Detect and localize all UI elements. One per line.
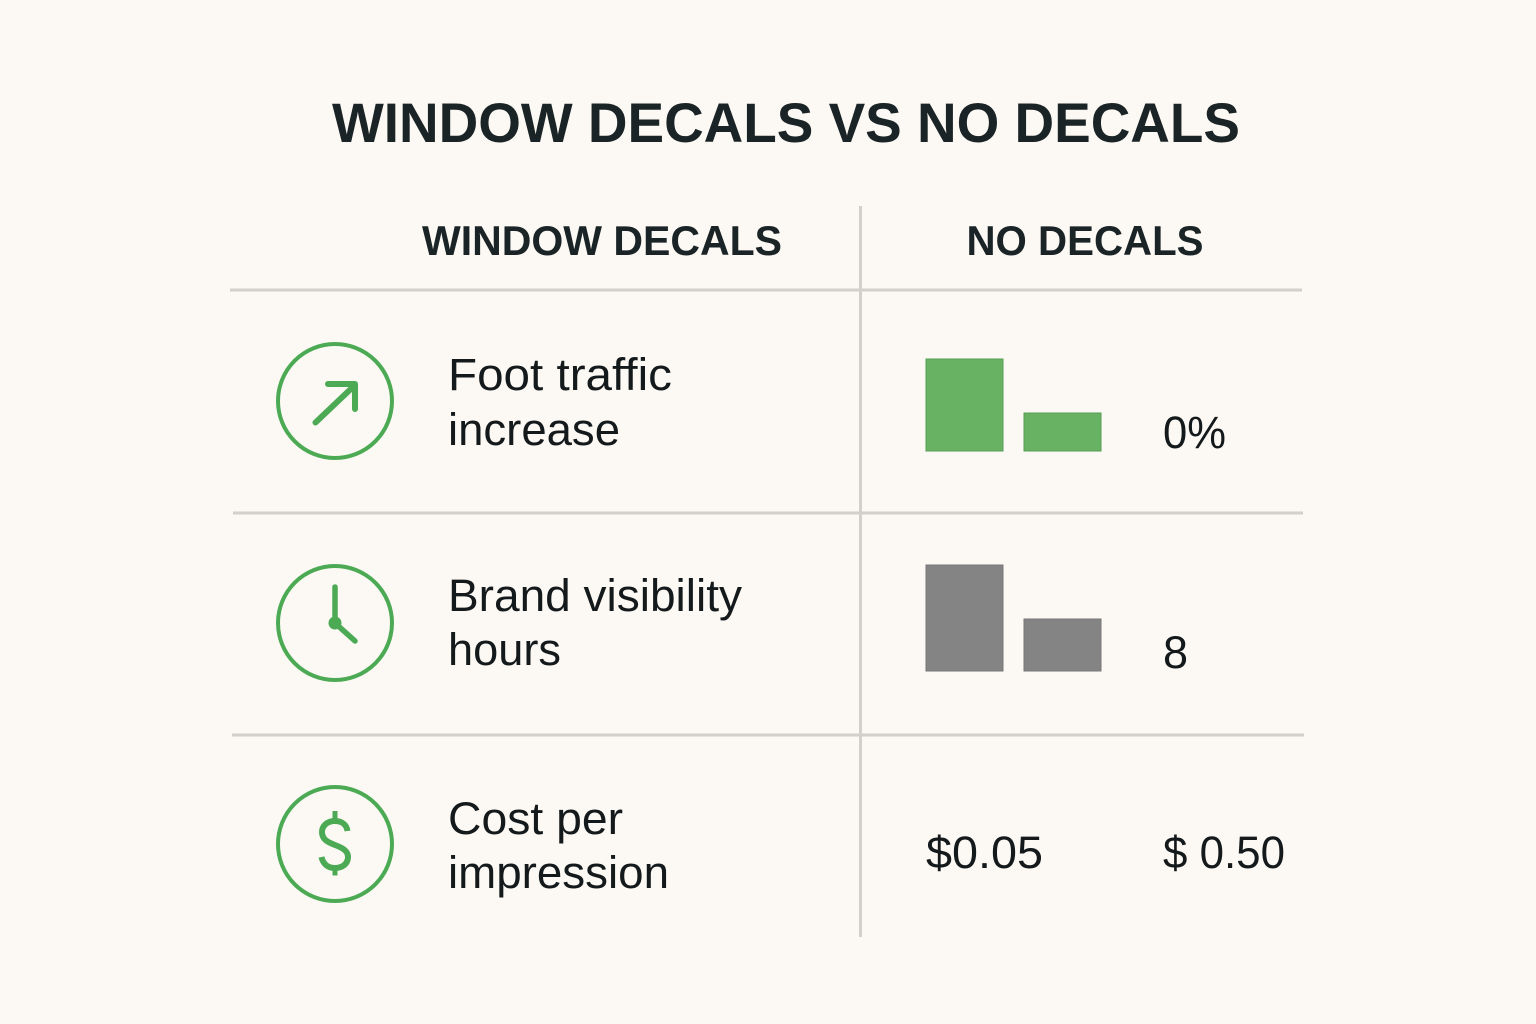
row label: foot traffic increase: increase bbox=[448, 404, 620, 455]
row label: cost per impression: impression bbox=[448, 847, 669, 898]
value: 8: 8 bbox=[1163, 627, 1188, 678]
icon: arrow up-right in circle bbox=[278, 344, 392, 458]
bar chart: foot traffic bbox=[926, 359, 1101, 451]
row label: cost per impression: Cost per bbox=[448, 793, 623, 844]
column heading: window decals: WINDOW DECALS bbox=[422, 217, 782, 264]
value: no decals cost: $ 0.50 bbox=[1163, 827, 1285, 878]
row label: foot traffic increase: Foot traffic bbox=[448, 349, 672, 400]
row label: brand visibility hours: Brand visibility bbox=[448, 570, 743, 621]
value: window decals cost: $0.05 bbox=[926, 827, 1043, 878]
table grid lines bbox=[230, 206, 1304, 937]
icon: dollar in circle bbox=[278, 787, 392, 901]
row label: brand visibility hours: hours bbox=[448, 624, 561, 675]
title: WINDOW DECALS VS NO DECALS bbox=[332, 91, 1240, 154]
column heading: no decals: NO DECALS bbox=[966, 217, 1204, 264]
bar chart: brand visibility bbox=[926, 565, 1101, 671]
value: 0%: 0% bbox=[1163, 407, 1226, 458]
icon: clock in circle bbox=[278, 566, 392, 680]
